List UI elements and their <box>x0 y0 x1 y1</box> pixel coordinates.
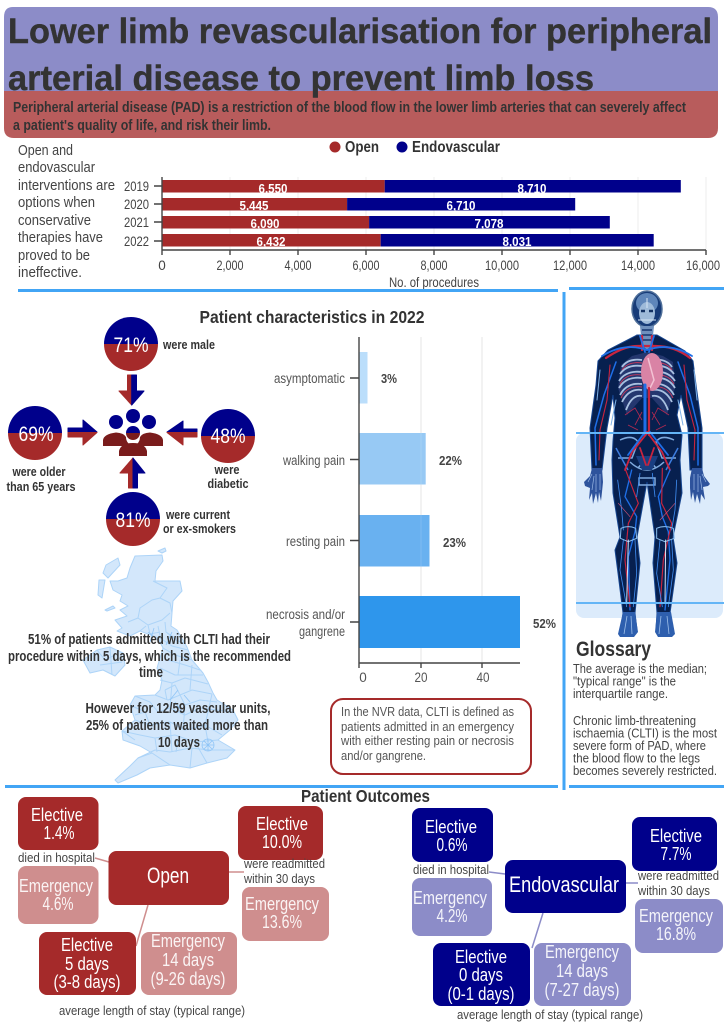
side text: interventions: therapies have <box>18 230 103 246</box>
bar chart: symptoms: 3% <box>381 371 397 386</box>
endovascular: labels: within 30 days <box>637 883 710 898</box>
bar chart: symptoms: gangrene <box>299 624 345 639</box>
bar chart: symptoms: necrosis and/or <box>266 607 345 622</box>
side text: interventions <box>18 143 115 281</box>
bar chart: symptoms: walking pain <box>282 453 345 468</box>
callout: CLTI definition <box>331 699 531 774</box>
text: procedure timing <box>8 632 291 681</box>
side text: interventions: conservative <box>18 213 91 229</box>
open: elective stay <box>39 932 136 995</box>
title: arterial disease to prevent limb loss <box>8 58 594 98</box>
open: emergency stay: Emergency <box>151 931 225 951</box>
endovascular: emergency readmission: 16.8% <box>656 924 696 944</box>
heading: glossary: Glossary <box>576 638 651 661</box>
endovascular: emergency stay: 14 days <box>556 961 608 981</box>
UK map <box>83 548 238 783</box>
open: emergency stay: 14 days <box>162 950 214 970</box>
stat: 81% smokers: 81% <box>116 509 150 532</box>
text: unit waiting times: 10 days <box>158 735 200 751</box>
endovascular: emergency readmission <box>635 899 723 953</box>
stat: 48% diabetic: 48% <box>210 425 246 448</box>
stat: 69% older <box>6 406 76 494</box>
open: labels: died in hospital <box>18 850 95 865</box>
open: emergency readmission: 13.6% <box>262 912 302 932</box>
text: unit waiting times: However for 12/59 vascular units, <box>86 701 270 717</box>
open: elective readmission: Elective <box>256 814 308 834</box>
endovascular: elective readmission: 7.7% <box>660 844 692 864</box>
stacked bar chart: procedures per year: 8,710 <box>518 182 547 196</box>
right foot <box>655 612 675 637</box>
text: unit waiting times: 25% of patients waited more than <box>86 718 268 734</box>
arrow: bottom <box>120 458 145 488</box>
stat: 71% male: were male <box>162 338 215 352</box>
open: elective death: Elective <box>31 805 83 825</box>
callout: CLTI definition: In the NVR data, CLTI is defined as <box>341 704 514 719</box>
open: emergency death <box>18 866 98 924</box>
left hand <box>584 468 603 504</box>
leg vessels <box>618 468 677 610</box>
stat: 69% older: 69% <box>18 423 54 446</box>
illustration: human circulatory system <box>584 291 710 637</box>
open: emergency death: 4.6% <box>42 894 74 914</box>
stat: 48% diabetic: were <box>214 463 240 477</box>
open: emergency readmission <box>242 887 329 941</box>
main vessels <box>595 336 698 465</box>
legend: Endovascular <box>412 139 500 156</box>
glossary text: severe form of PAD, where <box>573 738 706 753</box>
bar chart: symptoms: 20 <box>414 670 428 685</box>
arrow: top <box>119 375 144 405</box>
open: elective readmission <box>238 806 323 860</box>
endovascular: elective stay: 0 days <box>459 965 503 985</box>
intro text <box>13 100 686 134</box>
stacked bar chart: procedures per year: 2020 <box>124 197 149 212</box>
endovascular: emergency death <box>412 878 492 936</box>
glossary text <box>573 661 717 778</box>
arrow: left <box>68 420 97 445</box>
stat: 81% smokers <box>106 492 236 546</box>
stacked bar chart: procedures per year: 8,031 <box>502 235 532 249</box>
stat: 48% diabetic: diabetic <box>208 477 249 491</box>
open: central node: Open <box>147 863 189 888</box>
endovascular: central node: Endovascular <box>509 872 619 897</box>
stat: 81% smokers: or ex-smokers <box>163 522 236 536</box>
open: labels: average length of stay (typical range) <box>59 1003 245 1018</box>
endovascular: elective death: 0.6% <box>436 835 468 855</box>
bar chart: symptoms: 40 <box>476 670 490 685</box>
callout: CLTI definition: patients admitted in an emergency <box>341 719 514 734</box>
endovascular: emergency stay <box>534 942 631 1006</box>
endovascular: labels <box>413 862 719 1022</box>
bar chart: symptoms: resting pain <box>286 534 345 549</box>
stacked bar chart: procedures per year: 8,000 <box>420 258 448 273</box>
side text: interventions: proved to be <box>18 248 90 264</box>
text: procedure timing: time <box>139 665 163 681</box>
stacked bar chart: procedures per year: 2019 <box>124 179 149 194</box>
glossary text: interquartile range. <box>573 686 668 701</box>
heading: patient outcomes: Patient Outcomes <box>301 786 430 806</box>
endovascular: elective readmission <box>632 817 717 871</box>
stacked bar chart: procedures per year: 10,000 <box>485 258 519 273</box>
panel: open outcomes <box>18 797 329 1018</box>
bar chart: symptoms: 23% <box>443 535 466 550</box>
side text: interventions: interventions are <box>18 178 115 194</box>
panel: lower limb highlight <box>576 433 723 618</box>
endovascular: elective readmission: Elective <box>650 826 702 846</box>
endovascular: emergency stay: Emergency <box>545 942 619 962</box>
heading: patient characteristics: Patient characteristics in 2022 <box>200 307 425 327</box>
endovascular: emergency stay: (7-27 days) <box>544 980 620 1000</box>
bar chart: symptoms: 0 <box>359 670 367 685</box>
open: elective death: 1.4% <box>44 823 74 843</box>
open: labels: were readmitted <box>243 856 325 871</box>
open: elective stay: (3-8 days) <box>54 972 120 992</box>
stat: 71% male <box>104 317 215 371</box>
stat: 81% smokers: were current <box>165 508 231 522</box>
side text: interventions: ineffective. <box>18 265 82 281</box>
open: labels: within 30 days <box>243 871 315 886</box>
glossary text: Chronic limb-threatening <box>573 713 696 728</box>
bar chart: symptoms: asymptomatic <box>274 371 345 386</box>
stat: 69% older: were older <box>12 465 66 479</box>
title: Lower limb revascularisation for peripheral <box>8 11 712 51</box>
text: procedure timing: procedure within 5 days, which is the recommended <box>8 649 291 665</box>
open: elective stay: 5 days <box>65 954 109 974</box>
endovascular: elective death <box>412 808 493 862</box>
side text: interventions: endovascular <box>18 160 95 176</box>
left foot <box>618 612 638 637</box>
panel: endovascular outcomes <box>412 808 723 1022</box>
stacked bar chart: procedures per year: 6,710 <box>446 199 476 213</box>
stat: 48% diabetic <box>201 409 255 491</box>
text: procedure timing: 51% of patients admitted with CLTI had their <box>28 632 270 648</box>
stacked bar chart: procedures per year: 5,445 <box>240 199 269 213</box>
stacked bar chart: procedures per year: 12,000 <box>553 258 587 273</box>
open: emergency readmission: Emergency <box>245 894 319 914</box>
stacked bar chart: procedures per year: 2022 <box>124 234 149 249</box>
legend <box>330 139 500 156</box>
title <box>8 11 712 98</box>
stacked bar chart: procedures per year: 6,090 <box>250 217 280 231</box>
open: emergency stay <box>141 931 237 995</box>
callout: CLTI definition: with either resting pain or necrosis <box>340 733 514 748</box>
arrow: right <box>167 421 197 445</box>
stacked bar chart: procedures per year: 6,550 <box>258 182 288 196</box>
stacked bar chart: procedures per year: 6,432 <box>256 235 286 249</box>
text: unit waiting times <box>86 701 270 751</box>
open: central node <box>108 851 229 905</box>
ribcage <box>618 352 675 415</box>
stacked bar chart: procedures per year: 14,000 <box>621 258 655 273</box>
bar chart: symptoms <box>266 337 556 685</box>
bar chart: symptoms: 52% <box>533 616 556 631</box>
open: elective stay: Elective <box>61 935 113 955</box>
stat: 69% older: than 65 years <box>6 480 76 494</box>
endovascular: elective death: Elective <box>425 817 477 837</box>
open: elective readmission: 10.0% <box>262 832 302 852</box>
stacked bar chart: procedures per year: 4,000 <box>284 258 312 273</box>
endovascular: labels: died in hospital <box>413 862 489 877</box>
head <box>632 291 662 327</box>
icon: group of people <box>103 409 163 456</box>
header banner <box>4 7 718 138</box>
stacked bar chart: procedures per year: 6,000 <box>352 258 380 273</box>
stacked bar chart: procedures per year: 2,000 <box>216 258 244 273</box>
glossary text: "typical range" is the <box>573 674 676 688</box>
pelvis <box>616 437 678 485</box>
endovascular: elective stay <box>433 943 530 1006</box>
open: emergency death: Emergency <box>19 876 93 896</box>
glossary text: the blood flow to the legs <box>573 750 700 766</box>
stacked bar chart: procedures per year: 0 <box>158 258 166 273</box>
open: elective death <box>18 797 98 850</box>
endovascular: central node <box>505 860 626 913</box>
stacked bar chart: procedures per year: 2021 <box>124 215 149 230</box>
stacked bar chart: procedures per year: 7,078 <box>474 217 504 231</box>
callout: CLTI definition: and/or gangrene. <box>341 748 426 763</box>
endovascular: elective stay: Elective <box>455 947 507 967</box>
right hand <box>690 468 710 504</box>
endovascular: labels: average length of stay (typical range) <box>457 1007 643 1022</box>
bar chart: symptoms: 22% <box>439 453 462 468</box>
endovascular: emergency death: Emergency <box>413 888 487 908</box>
side text: interventions: Open and <box>18 143 73 159</box>
endovascular: emergency death: 4.2% <box>436 906 468 926</box>
side text: interventions: options when <box>18 195 95 211</box>
intro text: a patient's quality of life, and risk their limb. <box>13 118 271 134</box>
legend: Open <box>345 139 379 156</box>
open: labels <box>18 850 325 1018</box>
red speckle <box>625 408 669 430</box>
open: emergency stay: (9-26 days) <box>150 969 226 989</box>
endovascular: elective stay: (0-1 days) <box>448 984 514 1004</box>
axis label: No. of procedures <box>389 275 479 290</box>
stacked bar chart: procedures per year <box>124 177 720 290</box>
stat: 71% male: 71% <box>114 334 148 357</box>
